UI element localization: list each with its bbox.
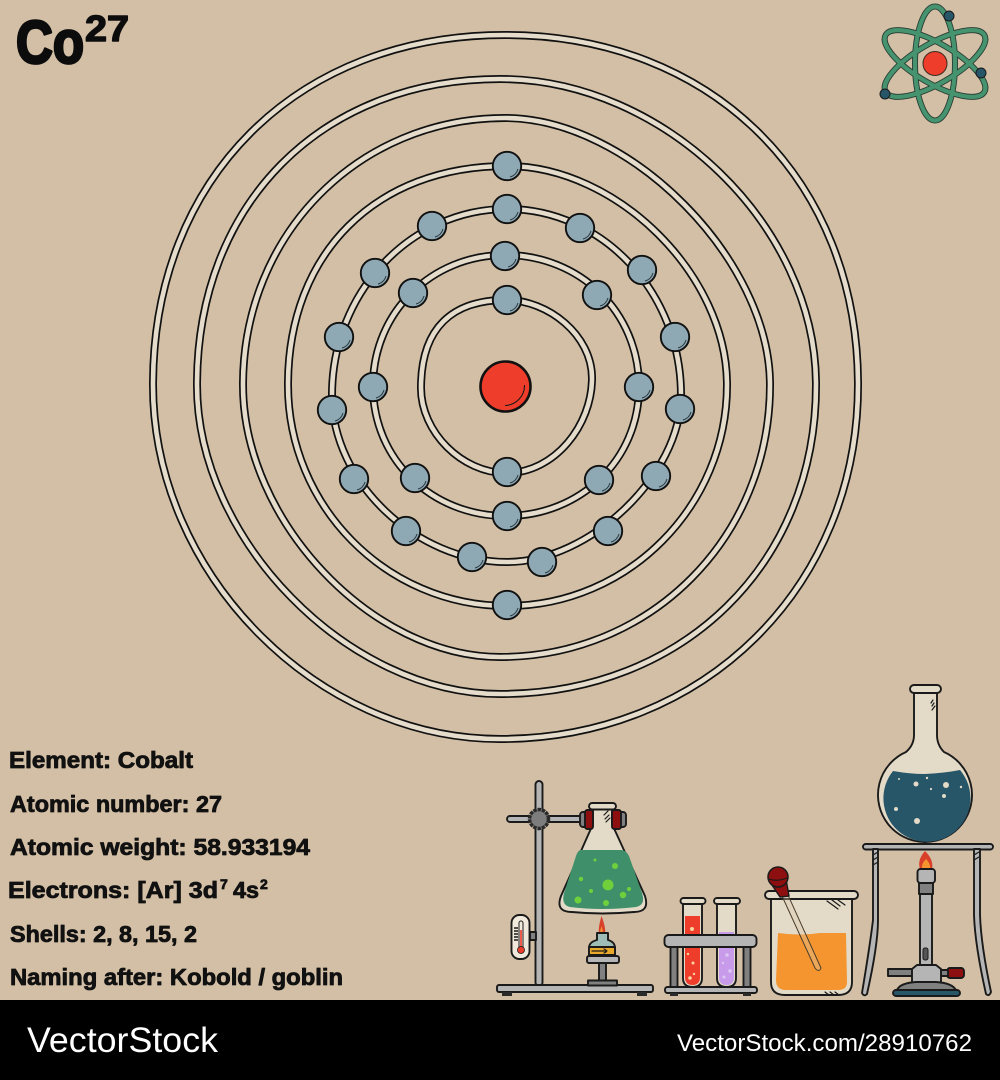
orbit ring 1 [421,300,592,473]
electron configuration: 2 [260,876,268,892]
title: element symbol Co27 [16,8,129,76]
naming origin: Naming after: Kobold / goblin [10,964,343,990]
beaker with orange liquid and dropper [765,867,858,995]
shells: Shells: 2, 8, 15, 2 [10,921,197,947]
orbit ring 6 [197,79,816,694]
bunsen burner [888,851,964,996]
watermark logo: VectorStock [27,1021,219,1060]
nucleus [480,362,530,412]
icon: thermometer [512,915,530,959]
title: element symbol Co27: 27 [85,8,129,49]
electron configuration: Electrons: [Ar] 3d [8,877,218,903]
icon: atom [876,6,994,120]
orbit ring 5 [243,118,770,657]
title: element symbol Co27: Co [16,9,84,76]
orbit ring 3 [332,209,681,562]
orbit ring 7 (outermost) [153,35,858,739]
electron configuration: 7 [220,876,228,892]
image id: VectorStock.com/28910762 [677,1030,972,1057]
element name: Element: Cobalt [9,747,193,773]
atomic number: Atomic number: 27 [10,791,222,817]
alcohol burner on stand [587,916,619,986]
electrons [318,152,694,619]
electron configuration: 4s [233,877,259,903]
footer bar with VectorStock watermark [0,1000,1000,1080]
orbit ring 2 [373,255,639,516]
orbit ring 4 [288,166,727,606]
lab stand with clamp and thermometer [497,781,653,996]
atomic weight: Atomic weight: 58.933194 [10,834,310,860]
tripod stand [862,844,993,995]
test tube rack with red and purple tubes [664,898,757,996]
round bottom flask with blue liquid [878,685,972,842]
info text block [8,747,343,990]
conical flask with green liquid [559,803,646,914]
